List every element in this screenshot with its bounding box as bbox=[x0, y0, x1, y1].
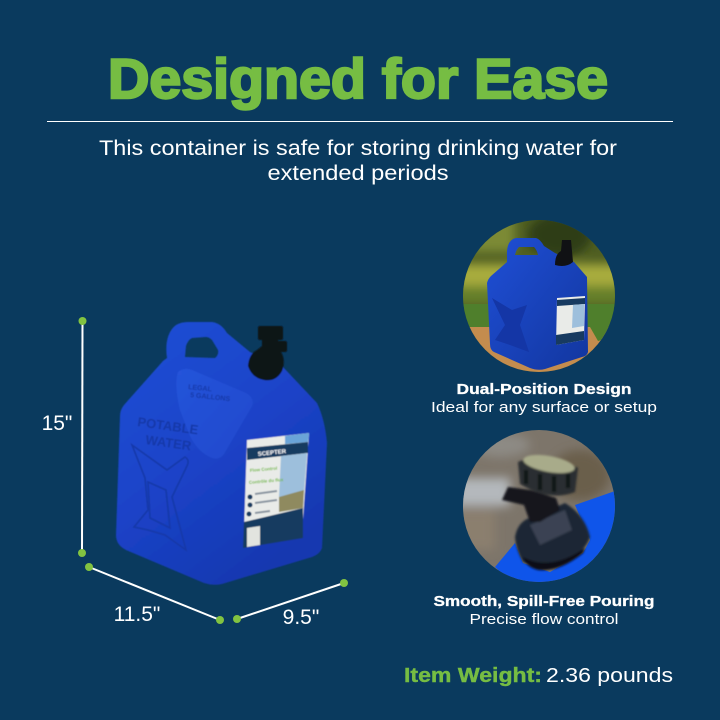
jug shoulder panel bbox=[176, 369, 253, 459]
caption: dual-position design: Ideal for any surface or setup bbox=[431, 399, 657, 416]
width dimension: 11.5 inches: 11.5" bbox=[114, 603, 160, 626]
small jug bbox=[487, 238, 588, 370]
jug embossed text: 5 GALLONS bbox=[190, 392, 231, 403]
jug label: Flow Control bbox=[250, 466, 277, 473]
photo: jug on table outdoors bbox=[463, 220, 615, 372]
jug embossed text bbox=[137, 384, 231, 453]
caption: smooth spill-free pouring bbox=[434, 593, 654, 628]
depth dimension: 9.5 inches: 9.5" bbox=[283, 606, 319, 629]
jug side embossing bbox=[132, 445, 188, 550]
height dimension: 15 inches bbox=[42, 317, 86, 557]
item weight: Item Weight: bbox=[404, 665, 542, 687]
title: Designed for Ease bbox=[108, 47, 608, 110]
subtitle: extended periods bbox=[268, 162, 448, 185]
caption: smooth spill-free pouring: Precise flow control bbox=[470, 611, 618, 628]
jug handle and body bbox=[116, 322, 327, 585]
height dimension: 15 inches: 15" bbox=[42, 412, 72, 435]
jug embossed text: LEGAL bbox=[188, 384, 213, 394]
jug label: SCEPTER bbox=[258, 449, 287, 458]
caption: smooth spill-free pouring: Smooth, Spill-Free Pouring bbox=[434, 593, 654, 610]
jug label: Contrôle du flux bbox=[249, 477, 284, 485]
jug embossed text: POTABLE bbox=[137, 414, 200, 438]
jug spout cap bbox=[248, 326, 287, 380]
jug label bbox=[243, 433, 309, 548]
subtitle: This container is safe for storing drinking water for bbox=[99, 137, 617, 160]
item weight bbox=[404, 665, 673, 687]
product image: blue jug bbox=[116, 322, 327, 585]
item weight: 2.36 pounds bbox=[546, 665, 673, 687]
width dimension: 11.5 inches bbox=[85, 563, 224, 626]
caption: dual-position design: Dual-Position Design bbox=[456, 381, 632, 398]
caption: dual-position design bbox=[431, 381, 657, 416]
jug embossed text: WATER bbox=[145, 432, 193, 453]
photo: spout close-up bbox=[455, 430, 615, 590]
depth dimension: 9.5 inches bbox=[233, 579, 348, 629]
